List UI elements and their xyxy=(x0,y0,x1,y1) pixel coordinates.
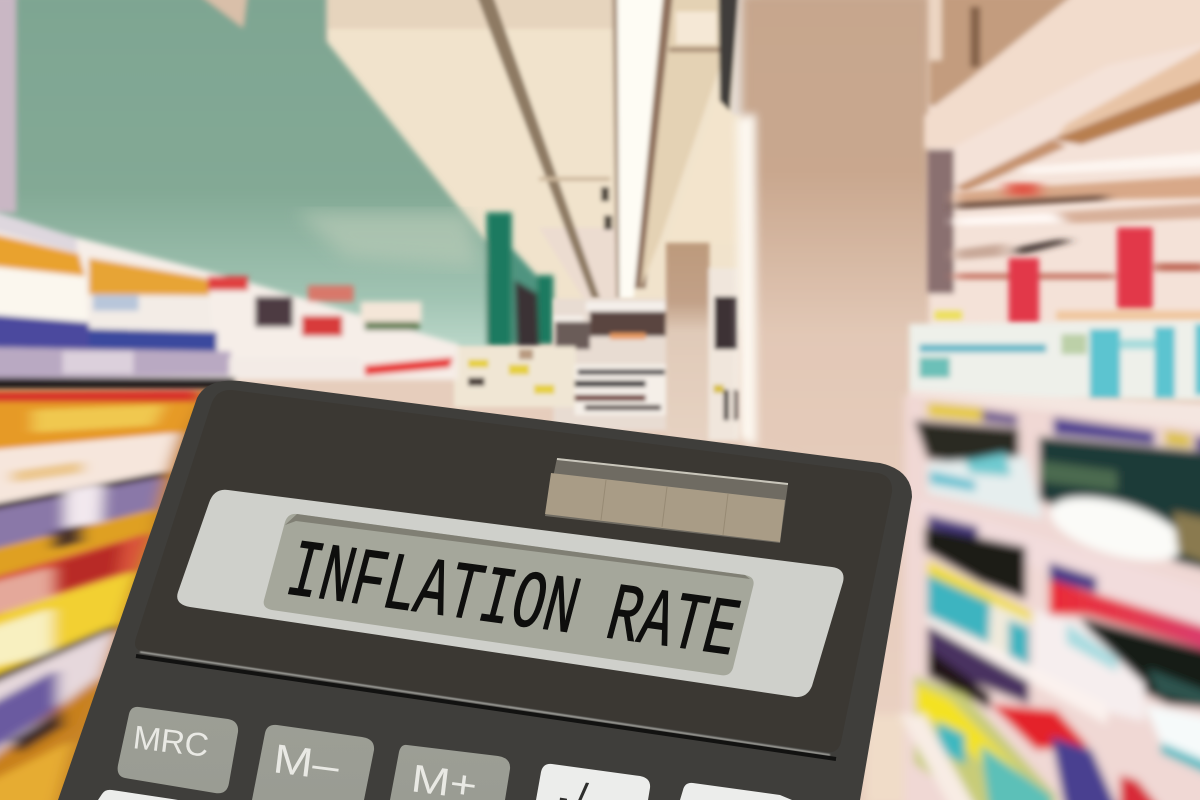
key: MRC: MRC xyxy=(131,718,211,764)
key: MRC xyxy=(118,707,238,793)
LCD screen top bevel xyxy=(285,514,750,579)
key: M minus xyxy=(252,725,374,800)
solar cell xyxy=(545,458,788,543)
right upper ceiling and streaks xyxy=(924,0,1200,329)
right upper product streaks xyxy=(955,152,1200,279)
panel edge highlight xyxy=(140,652,830,755)
far aisle shelves and columns xyxy=(454,243,739,441)
ceiling and light fixture xyxy=(326,0,758,329)
key: white key right xyxy=(680,783,792,800)
calculator body xyxy=(58,381,912,800)
silver display surround xyxy=(177,490,844,697)
right middle shelf: blurred goods xyxy=(909,321,1200,437)
left shelves lower rows xyxy=(0,390,210,800)
central pillar xyxy=(737,0,965,800)
LCD text: INFLATION RATE xyxy=(277,527,748,679)
LCD screen xyxy=(264,514,754,675)
key: M minus: M– xyxy=(271,735,342,790)
calculator xyxy=(58,381,912,800)
top display panel xyxy=(135,390,892,752)
key: white key left xyxy=(98,790,178,800)
key: square root xyxy=(536,764,650,800)
soft pale patch on wall xyxy=(296,212,478,268)
red shelf signs xyxy=(935,228,1200,324)
left shelves top row xyxy=(0,210,458,390)
key: M plus xyxy=(390,745,510,800)
panel edge shadow xyxy=(136,656,836,759)
right lower shelves: blurred goods xyxy=(899,395,1200,800)
green wall xyxy=(0,0,553,349)
